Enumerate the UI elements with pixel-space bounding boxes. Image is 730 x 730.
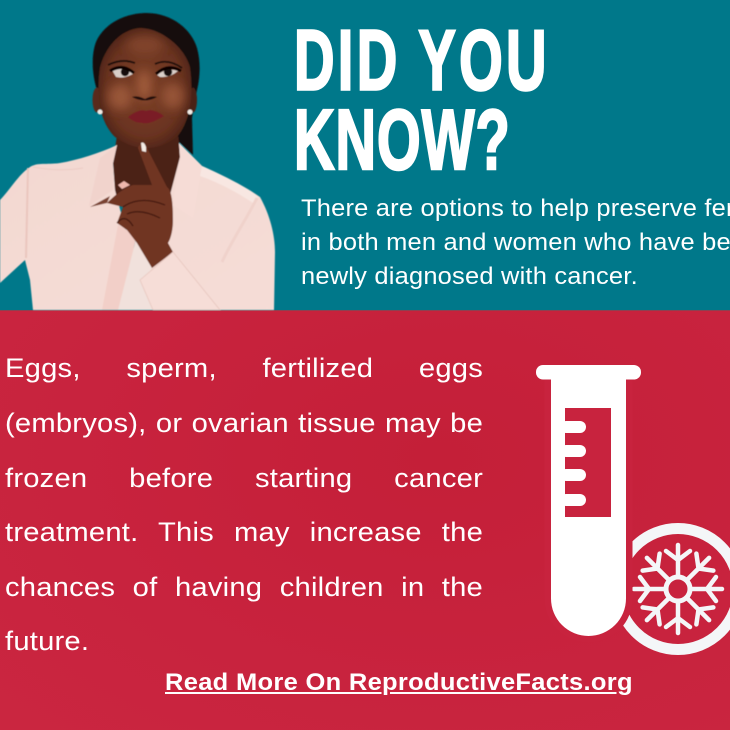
text block: fertility preservation statement	[301, 195, 730, 290]
text block: freezing eggs, sperm, embryos or tissue	[5, 353, 483, 656]
brows	[108, 61, 135, 65]
icon: frozen ring	[618, 528, 730, 650]
photo: thoughtful woman with finger on chin	[0, 12, 276, 311]
panel: teal header background	[0, 0, 730, 310]
shirt placket	[102, 225, 137, 310]
text block: freezing eggs, sperm, embryos or tissue: chances of having children in the	[5, 572, 483, 602]
icon: test tube with snowflake	[536, 365, 730, 655]
shirt centre panel	[118, 235, 154, 310]
hair	[93, 13, 200, 155]
link: Read More On ReproductiveFacts.org: Read More On ReproductiveFacts.org	[165, 669, 633, 696]
collar left	[89, 145, 117, 206]
heading: Did You Know?	[294, 15, 550, 180]
shirt	[0, 143, 275, 310]
cuff	[140, 252, 220, 310]
eyes	[112, 69, 133, 78]
text block: freezing eggs, sperm, embryos or tissue: treatment. This may increase the	[5, 517, 483, 547]
text block: freezing eggs, sperm, embryos or tissue: Eggs, sperm, fertilized eggs	[5, 353, 483, 383]
text block: freezing eggs, sperm, embryos or tissue: frozen before starting cancer	[5, 463, 483, 493]
ears	[92, 88, 102, 112]
hand and finger	[107, 144, 173, 268]
text block: fertility preservation statement: newly diagnosed with cancer.	[301, 263, 638, 290]
neck	[113, 135, 181, 215]
earrings	[98, 110, 102, 114]
icon: test tube	[536, 365, 641, 636]
heading: Did You Know?: DID YOU	[294, 15, 550, 108]
icon: snowflake	[634, 545, 722, 633]
nose	[132, 96, 157, 100]
collar right	[173, 143, 202, 218]
text block: freezing eggs, sperm, embryos or tissue: future.	[5, 626, 89, 656]
lips	[128, 110, 164, 123]
panel: red textured lower background	[0, 310, 730, 730]
text block: freezing eggs, sperm, embryos or tissue: (embryos), or ovarian tissue may be	[5, 408, 483, 438]
face	[98, 28, 192, 148]
